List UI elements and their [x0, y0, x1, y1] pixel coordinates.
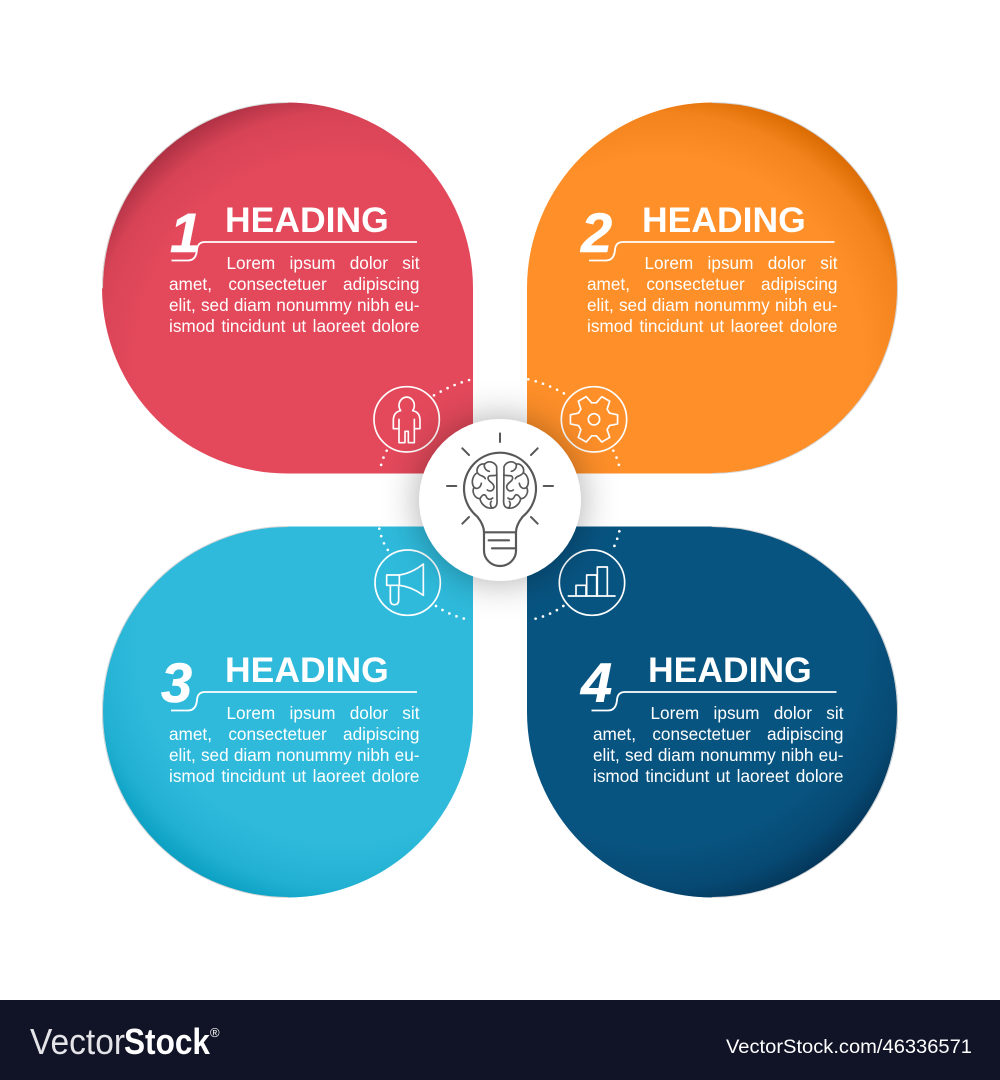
number 4: 4 [581, 651, 612, 714]
center circle with brain light bulb icon [419, 419, 581, 581]
red petal shape with icon [102, 102, 473, 474]
body text 3 [169, 703, 420, 786]
footer bar [0, 1000, 1000, 1080]
panel 2: orange petal [527, 102, 898, 474]
navy petal shape with icon [527, 526, 898, 898]
panel 1: red petal [102, 102, 473, 474]
body text 2: amet, consectetuer adipiscing [587, 274, 838, 294]
body text 4: Lorem ipsum dolor sit [650, 703, 844, 723]
panel 4: navy petal [527, 526, 898, 898]
heading 1: HEADING [225, 200, 389, 240]
heading 3: HEADING [225, 650, 389, 690]
number 1: 1 [170, 201, 201, 264]
footer wordmark and image id: VectorStock.com/46336571 [726, 1037, 972, 1058]
body text 4: elit, sed diam nonummy nibh eu- [593, 745, 844, 765]
body text 1: elit, sed diam nonummy nibh eu- [169, 295, 420, 315]
body text 3: amet, consectetuer adipiscing [169, 724, 420, 744]
cyan petal shape with icon [102, 526, 473, 898]
body text 2: ismod tincidunt ut laoreet dolore [587, 316, 838, 336]
body text 2 [587, 253, 838, 336]
body text 3: ismod tincidunt ut laoreet dolore [169, 766, 420, 786]
heading 4: HEADING [648, 650, 812, 690]
icon: brain light bulb [446, 432, 554, 568]
body text 4: amet, consectetuer adipiscing [593, 724, 844, 744]
body text 4: ismod tincidunt ut laoreet dolore [593, 766, 844, 786]
panel 3: cyan petal [102, 526, 473, 898]
footer wordmark and image id: ® [210, 1025, 220, 1040]
body text 1: Lorem ipsum dolor sit [226, 253, 420, 273]
body text 4 [593, 703, 844, 786]
orange petal shape with icon [527, 102, 898, 474]
footer wordmark and image id [30, 1021, 972, 1062]
heading 2: HEADING [642, 200, 806, 240]
body text 2: Lorem ipsum dolor sit [644, 253, 838, 273]
body text 3: Lorem ipsum dolor sit [226, 703, 420, 723]
body text 1 [169, 253, 420, 336]
body text 1: amet, consectetuer adipiscing [169, 274, 420, 294]
body text 3: elit, sed diam nonummy nibh eu- [169, 745, 420, 765]
footer wordmark and image id: Vector [30, 1021, 125, 1062]
number 2: 2 [581, 201, 612, 264]
footer wordmark and image id: Stock [124, 1021, 211, 1062]
body text 2: elit, sed diam nonummy nibh eu- [587, 295, 838, 315]
body text 1: ismod tincidunt ut laoreet dolore [169, 316, 420, 336]
number 3: 3 [161, 651, 192, 714]
